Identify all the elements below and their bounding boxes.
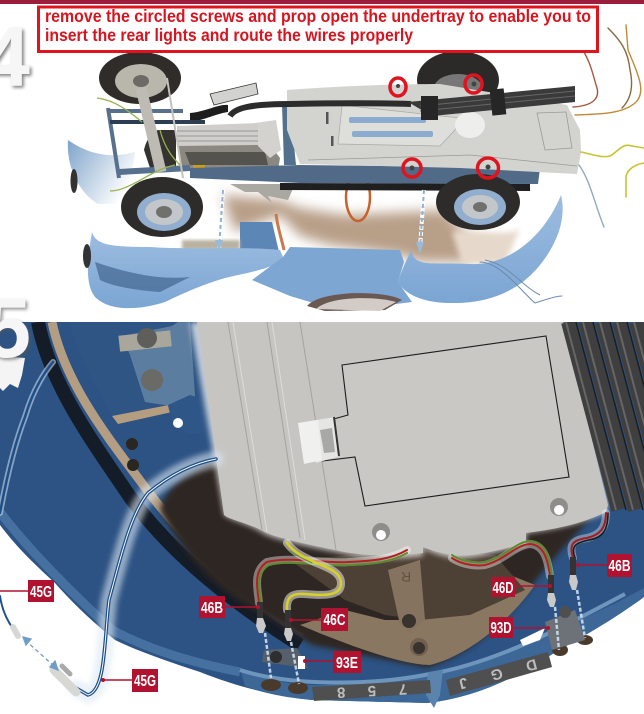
- fitting guide lines: [265, 590, 585, 684]
- mounting hole right: [550, 498, 568, 516]
- mount with hole: [168, 395, 196, 428]
- blue body: [0, 322, 644, 703]
- tan inner ring: [38, 322, 300, 645]
- rear plate holders: [261, 635, 593, 694]
- tan ledge: [112, 406, 170, 424]
- body right wing: [398, 195, 563, 303]
- label: 93D: [489, 617, 550, 638]
- red-green wire right: [452, 541, 552, 576]
- access hatch: [316, 336, 569, 506]
- cream interior: [452, 228, 520, 264]
- bracket: [118, 322, 196, 410]
- label: 93E: [303, 651, 361, 673]
- label: 46B left: [199, 596, 260, 618]
- front wheel top: [99, 52, 181, 104]
- circle: screw 1: [390, 78, 406, 96]
- fitting arrows: [215, 190, 424, 254]
- instruction callout: remove the circled screws and prop open the undertray to enable you to: [45, 6, 591, 26]
- interior shadow: [222, 195, 470, 262]
- chassis rail: [190, 165, 540, 184]
- upper blue panel: [68, 322, 200, 418]
- mounting hole left: [372, 523, 390, 541]
- label: 93E: 93E: [336, 655, 358, 672]
- leaf spring: [230, 86, 575, 120]
- white cut-out near step number: [0, 356, 25, 391]
- undertray: [287, 84, 581, 174]
- top rule: [0, 0, 644, 4]
- label: 45G lower: [101, 669, 158, 692]
- label: 45G left: [0, 580, 54, 602]
- rubber rods: [566, 322, 644, 510]
- connection arrow: [23, 637, 58, 670]
- number plate right: DGJ: [457, 655, 539, 692]
- screw circles: [390, 75, 498, 178]
- label: 93D: 93D: [490, 620, 512, 637]
- steering wheel: [346, 173, 370, 221]
- hatch latch: [298, 417, 340, 464]
- front fender: [68, 140, 135, 204]
- circle: screw 3: [403, 159, 421, 177]
- light mounts: [262, 606, 585, 669]
- engine: [144, 82, 296, 168]
- label: 46D: 46D: [492, 580, 514, 597]
- number plate right: [446, 652, 552, 696]
- wheel front bottom: [121, 177, 203, 237]
- step 4 illustration: car underside: [68, 51, 581, 311]
- label: 46D: [491, 577, 552, 597]
- bumper: [240, 588, 644, 708]
- yellow-green wire: [287, 543, 341, 610]
- label: 46C: [289, 608, 348, 631]
- label: 46C: 46C: [324, 612, 346, 629]
- rear wheel top: [417, 53, 499, 92]
- pivot arm: R: [401, 569, 411, 585]
- number plate left: [312, 680, 431, 701]
- front frame: [97, 78, 205, 191]
- circle: screw 4: [478, 158, 498, 178]
- interior brown well: [160, 458, 597, 668]
- label: 46B right: [576, 554, 632, 577]
- instruction callout: insert the rear lights and route the wires properly: [45, 25, 413, 45]
- body left wing: [83, 232, 283, 308]
- orange trim: [276, 214, 284, 250]
- bullet terminals: [256, 557, 578, 641]
- label: 46B right: 46B: [608, 558, 630, 575]
- circle: screw 2: [465, 75, 482, 93]
- instruction callout: [38, 6, 598, 52]
- interior blue block: [240, 222, 278, 250]
- undertray close-up: [190, 322, 608, 558]
- body centre: [252, 247, 412, 311]
- label: 46B left: 46B: [201, 600, 223, 617]
- pivot arm: [388, 560, 428, 656]
- well screws: [126, 438, 139, 471]
- outer rim shade: [0, 512, 240, 672]
- loose wires: [480, 25, 644, 303]
- panel: step 5 close-up: [0, 322, 644, 708]
- number plate left: 758: [337, 680, 407, 701]
- red-black wire right: [571, 513, 608, 558]
- dark chain strip: [182, 240, 240, 250]
- suspension: [230, 184, 295, 203]
- label: 45G left: 45G: [30, 584, 52, 601]
- red-green wire left: [257, 550, 407, 603]
- blue rear-light wire with connector: [0, 362, 216, 695]
- wheel rear bottom: [436, 174, 520, 230]
- label: 45G lower: 45G: [134, 673, 156, 690]
